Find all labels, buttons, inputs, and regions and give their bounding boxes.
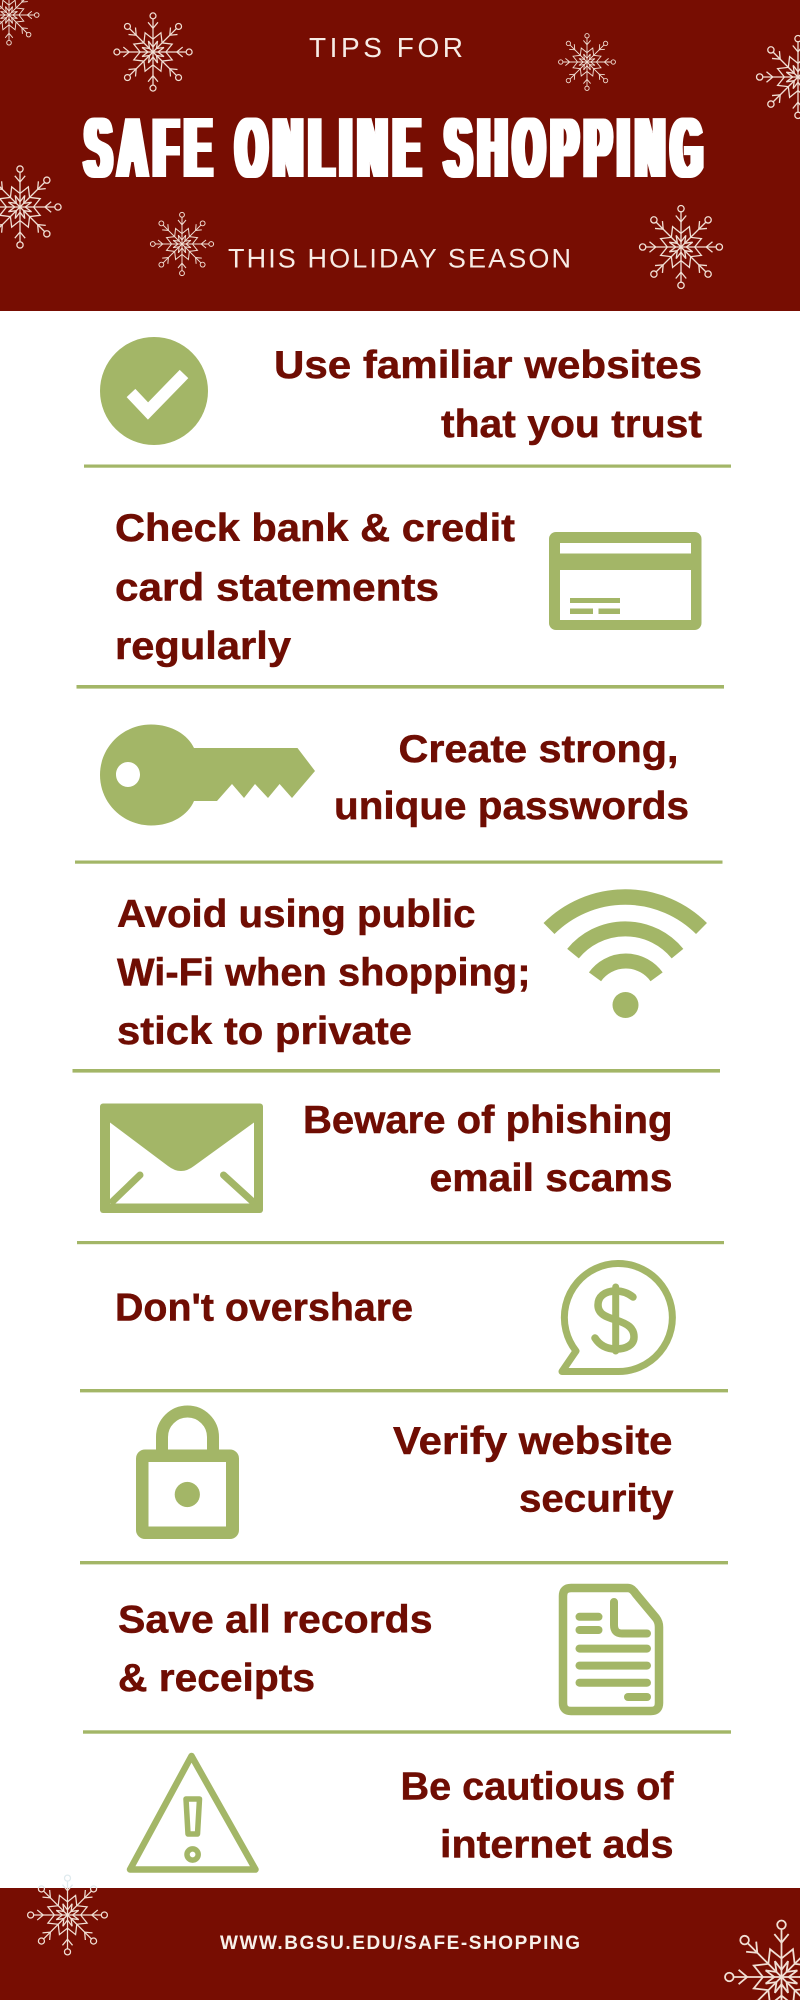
panel: tip 7 website security	[80, 1412, 728, 1564]
text: email scams: email scams	[430, 1157, 672, 1200]
icon: warning triangle	[130, 1756, 256, 1870]
icon: dollar speech bubble	[562, 1264, 672, 1372]
panel: tip 3 strong passwords	[75, 724, 722, 864]
panel: tip 2 check statements	[76, 507, 724, 689]
text: unique passwords: unique passwords	[334, 785, 689, 828]
icon: envelope	[100, 1104, 263, 1213]
panel: tip 9 internet ads	[130, 1756, 675, 1870]
panel: header banner	[0, 0, 800, 311]
icon: document	[563, 1588, 659, 1711]
panel: footer banner	[0, 1875, 800, 2000]
heading: tips for: TIPS FOR	[309, 32, 463, 63]
panel: tip 1 familiar websites	[84, 337, 731, 468]
icon: padlock	[136, 1412, 239, 1539]
heading: this holiday season: THIS HOLIDAY SEASON	[228, 244, 571, 274]
icon: key	[100, 724, 315, 826]
text: stick to private: stick to private	[117, 1010, 412, 1053]
text: security: security	[519, 1478, 674, 1520]
panel: tip 6 overshare	[80, 1264, 728, 1392]
panel: tip 4 public wifi	[72, 893, 720, 1073]
text: check bank and credit: Check bank & credit	[115, 507, 515, 550]
icon: wifi	[549, 897, 702, 1018]
panel: tip 5 phishing	[77, 1099, 724, 1244]
icon: footer snowflake left	[28, 1875, 107, 1955]
icon: footer snowflake right	[725, 1921, 800, 2000]
text: and receipts: & receipts	[118, 1657, 315, 1700]
icon: credit card	[549, 532, 702, 630]
text: internet ads: internet ads	[440, 1824, 674, 1866]
text: that you trust: that you trust	[441, 403, 702, 446]
text: verify website: Verify website	[393, 1420, 672, 1463]
panel: tip 8 save records	[83, 1588, 731, 1734]
text: beware of phishing: Beware of phishing	[303, 1099, 672, 1142]
text: wi-fi when shopping: Wi-Fi when shopping;	[117, 952, 530, 994]
text: website url: WWW.BGSU.EDU/SAFE-SHOPPING	[220, 1933, 580, 1954]
icon: check mark in circle	[100, 337, 208, 445]
text: be cautious of: Be cautious of	[400, 1766, 675, 1808]
text: don't overshare: Don't overshare	[115, 1286, 413, 1330]
text: use familiar websites: Use familiar websites	[274, 344, 702, 387]
text: card statements: card statements	[115, 566, 439, 610]
text: save all records: Save all records	[118, 1598, 432, 1642]
text: avoid using public: Avoid using public	[117, 893, 475, 936]
text: create strong: Create strong,	[398, 728, 678, 771]
text: regularly: regularly	[115, 625, 291, 668]
icon: snowflakes in header	[0, 0, 800, 288]
